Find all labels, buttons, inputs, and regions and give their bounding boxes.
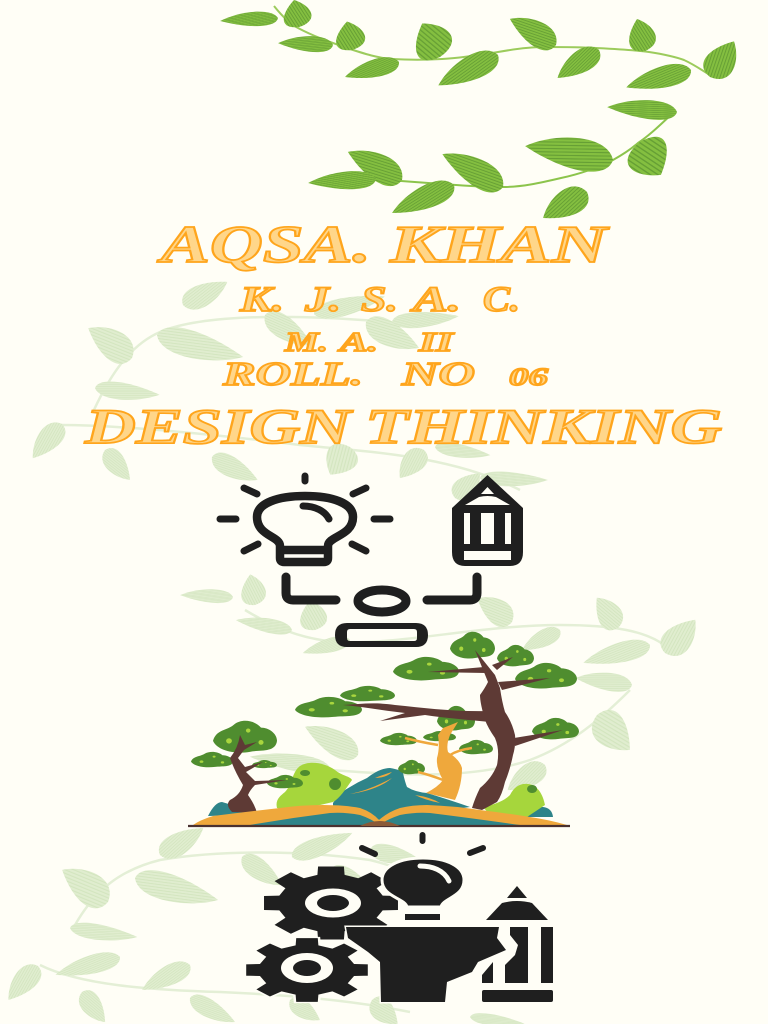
bulb	[257, 496, 353, 562]
text: college: A.	[410, 279, 461, 319]
left tree	[228, 735, 287, 813]
teal hills	[208, 768, 553, 820]
text: college: J.	[304, 279, 341, 319]
person head	[358, 590, 406, 612]
title: name	[157, 216, 609, 274]
pencil	[452, 475, 523, 566]
title: name: AQSA.	[157, 216, 371, 274]
bulb highlight	[420, 866, 449, 881]
hill highlights	[350, 772, 440, 803]
tree canopies	[191, 632, 579, 788]
pencil base	[482, 990, 553, 1002]
title: name: KHAN	[389, 216, 609, 274]
pencil centre column	[505, 927, 528, 983]
pale vine: bottom	[0, 819, 525, 1024]
big tree	[343, 650, 563, 810]
pencil shoulder	[486, 901, 548, 920]
green vine: lower	[308, 97, 679, 229]
lower gear	[245, 937, 369, 1003]
bulb rays	[362, 835, 483, 854]
book base line	[188, 825, 570, 827]
text: class: A.	[337, 327, 378, 357]
pencil tip	[507, 886, 527, 898]
bulb rays	[220, 476, 390, 551]
book inner pages	[250, 813, 520, 825]
text: class: II	[417, 327, 455, 357]
text: college: K.	[239, 279, 284, 319]
text: class	[284, 327, 455, 357]
text: college: S.	[361, 279, 398, 319]
person body	[335, 623, 428, 647]
lime bushes	[277, 763, 545, 817]
bulb base	[405, 914, 440, 920]
right connector	[427, 577, 477, 600]
pale vine: centre right	[180, 572, 706, 799]
illustration: trees growing from an open book	[188, 632, 579, 826]
bulb highlight	[303, 506, 329, 519]
text: roll number	[222, 356, 549, 393]
text: class: M.	[284, 327, 328, 357]
pale vine: middle	[24, 272, 548, 506]
pencil right column	[541, 927, 553, 983]
heading: design thinking: THINKING	[365, 398, 722, 454]
book pages	[193, 805, 567, 825]
upper gear	[264, 867, 398, 939]
text: college	[239, 279, 520, 319]
green vine: top	[220, 0, 747, 98]
head silhouette	[346, 927, 506, 1002]
orange tree	[405, 722, 472, 800]
text: roll number: NO	[401, 356, 475, 393]
heading: design thinking: DESIGN	[84, 398, 354, 454]
solid bulb	[382, 858, 464, 907]
heading: design thinking	[84, 398, 722, 454]
text: roll number: ROLL.	[222, 356, 363, 393]
bush spots	[300, 770, 537, 793]
icon: solid gears, bulb, head and pencil	[245, 835, 553, 1003]
icon: outline bulb, pencil and person	[220, 475, 523, 647]
text: college: C.	[483, 279, 520, 319]
left connector	[286, 577, 336, 600]
text: roll number: 06	[509, 364, 549, 391]
pencil left column	[482, 962, 493, 983]
book spine	[360, 821, 400, 826]
